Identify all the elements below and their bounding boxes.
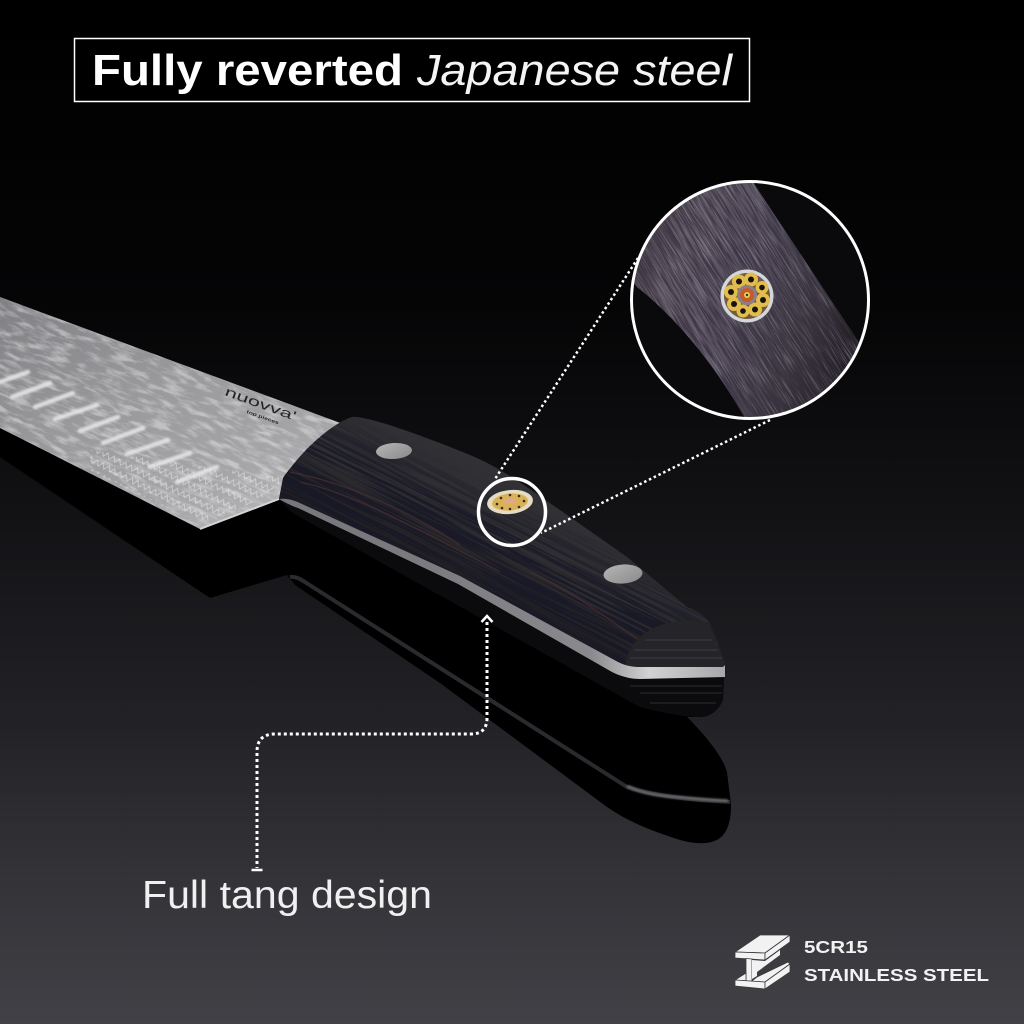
handle [279, 416, 725, 718]
rivet top [376, 442, 412, 460]
mosaic pin [486, 488, 534, 516]
blade logo: top pieces [246, 409, 280, 426]
blade logo [221, 384, 299, 430]
mosaic pin close-up [720, 270, 774, 322]
blade dimples [0, 372, 217, 482]
lens ring [632, 182, 868, 418]
dotted connector lines [495, 258, 770, 533]
steel liner [279, 499, 725, 679]
handle butt [625, 620, 725, 668]
rivet bottom [603, 563, 643, 585]
knife reflection and shadow [0, 428, 731, 843]
title bold text: Fully reverted [92, 46, 403, 95]
damascus pattern [0, 297, 340, 526]
material label: STAINLESS STEEL [804, 965, 989, 985]
reflected steel strip [290, 577, 730, 802]
material label: 5CR15 [804, 937, 868, 957]
icon: steel I-beam [735, 935, 790, 989]
material label [804, 937, 989, 985]
title italic text: Japanese steel [416, 46, 733, 95]
title box [74, 38, 750, 102]
blade bright edge [200, 499, 279, 529]
handle lower dark scale [279, 499, 725, 720]
wood grain [280, 424, 725, 666]
full tang label: Full tang design [142, 874, 432, 917]
full tang arrow [252, 616, 492, 870]
blade logo: nuovva' [223, 384, 299, 423]
zoom lens: mosaic pin close-up [630, 180, 870, 420]
small highlight ring on handle [478, 478, 546, 546]
blade [0, 297, 340, 530]
